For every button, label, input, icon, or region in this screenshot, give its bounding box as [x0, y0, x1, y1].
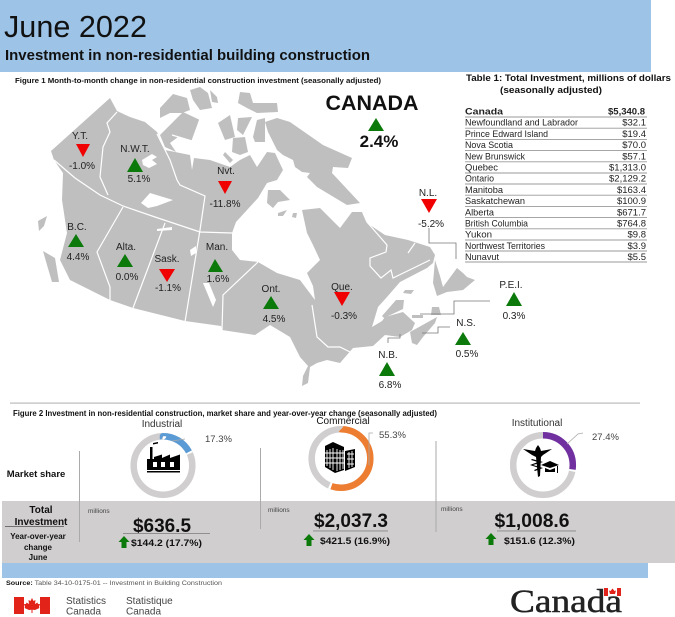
table rows: New Brunswick	[465, 151, 525, 162]
table title	[466, 73, 671, 96]
arrow: up	[304, 534, 314, 546]
panel: institutional: $151.6 (12.3%)	[504, 536, 575, 547]
table rows: Saskatchewan	[465, 196, 525, 207]
Nova Scotia label: N.S.	[456, 318, 476, 329]
table rows: Alberta	[465, 207, 495, 218]
Prince Edward Island label	[499, 280, 526, 322]
Manitoba label: 1.6%	[207, 274, 230, 285]
table rows: Ontario	[465, 174, 494, 185]
table rows: $57.1	[622, 151, 646, 162]
panel: commercial: millions	[268, 507, 290, 514]
national change callout	[326, 92, 418, 151]
row labels: change	[24, 543, 53, 552]
panel: industrial	[88, 419, 232, 549]
Yukon label: Y.T.	[72, 131, 88, 142]
header banner	[0, 0, 651, 72]
row labels	[5, 469, 68, 562]
icon: maple leaf	[24, 598, 40, 613]
table rows: Prince Edward Island	[465, 129, 548, 140]
panel: commercial: 55.3%	[379, 430, 406, 441]
figure 2 heading: Figure 2 Investment in non-residential construction, market share and year-over-year change (seasonally adjusted)	[13, 409, 437, 418]
table rules	[465, 117, 647, 262]
table rows: $100.9	[617, 196, 646, 207]
Statistics Canada logo: Statistique	[126, 596, 173, 607]
national change callout: CANADA	[326, 92, 418, 115]
British Columbia label	[67, 222, 90, 263]
Nunavut label: -11.8%	[210, 199, 241, 210]
panel: industrial: millions	[88, 508, 110, 515]
table rows: Northwest Territories	[465, 241, 545, 252]
arrow: up	[118, 536, 130, 548]
icon: caduceus and graduation cap	[523, 445, 559, 477]
Quebec label: Que.	[331, 282, 353, 293]
Nunavut label: Nvt.	[217, 166, 235, 177]
panel: institutional: millions	[441, 506, 463, 513]
panel: industrial: 17.3%	[205, 434, 232, 445]
icon: office buildings	[325, 442, 355, 473]
Nunavut label	[210, 166, 241, 210]
row labels: Investment	[15, 517, 68, 528]
grey investment band	[2, 501, 675, 563]
Quebec label: -0.3%	[331, 311, 357, 322]
Ontario label: 4.5%	[263, 314, 286, 325]
Alberta label: Alta.	[116, 242, 136, 253]
subtitle: Investment in non-residential building construction	[5, 47, 370, 64]
donut: commercial 55.3%	[312, 429, 370, 488]
panel: industrial: $636.5	[133, 516, 191, 537]
New Brunswick label: N.B.	[378, 350, 398, 361]
leader lines	[388, 228, 490, 343]
New Brunswick label: 6.8%	[379, 380, 402, 391]
map of Canada	[38, 87, 490, 386]
row labels: June	[29, 553, 48, 562]
Northwest Territories label	[120, 144, 151, 185]
table rows: $5,340.8	[608, 106, 645, 118]
table rows: $3.9	[628, 241, 646, 252]
Manitoba label: Man.	[206, 242, 228, 253]
New Brunswick label	[378, 350, 402, 391]
table rows	[465, 106, 646, 263]
panel: commercial	[268, 416, 406, 547]
Northwest Territories label: 5.1%	[128, 174, 151, 185]
Newfoundland and Labrador label: -5.2%	[418, 219, 444, 230]
panel: institutional: $1,008.6	[494, 511, 570, 532]
panel: institutional: 27.4%	[592, 432, 619, 443]
Ontario label: Ont.	[262, 284, 280, 295]
table title: (seasonally adjusted)	[500, 85, 602, 96]
Northwest Territories label: N.W.T.	[120, 144, 150, 155]
Prince Edward Island label: P.E.I.	[499, 280, 523, 291]
table rows: $5.5	[628, 252, 646, 263]
table rows: $163.4	[617, 185, 646, 196]
panel: commercial: Commercial	[316, 416, 370, 427]
table rows: Quebec	[465, 162, 498, 174]
table rows: Nova Scotia	[465, 140, 514, 151]
Newfoundland and Labrador label: N.L.	[419, 188, 437, 199]
row labels: Year-over-year	[10, 532, 66, 541]
table rows: $70.0	[622, 140, 646, 151]
Saskatchewan label	[154, 254, 181, 294]
row labels: Market share	[7, 469, 65, 480]
Saskatchewan label: Sask.	[154, 254, 180, 265]
table rows: $1,313.0	[609, 162, 646, 174]
table rows: $2,129.2	[609, 174, 646, 185]
Yukon label: -1.0%	[69, 161, 95, 172]
table rows: $19.4	[622, 129, 646, 140]
panel: industrial: $144.2 (17.7%)	[131, 538, 202, 549]
Yukon label	[69, 131, 95, 172]
Ontario label	[262, 284, 286, 325]
Manitoba label	[206, 242, 230, 285]
donut: institutional 27.4%	[513, 435, 573, 495]
Statistics Canada logo: Statistics	[66, 596, 106, 607]
icon: small flag	[604, 588, 621, 596]
panel: industrial: Industrial	[142, 419, 182, 430]
national change callout: 2.4%	[360, 132, 398, 151]
figure 1 heading: Figure 1 Month-to-month change in non-residential construction investment (seasonally adjusted)	[15, 76, 381, 85]
panel: institutional	[441, 418, 619, 547]
table rows: Nunavut	[465, 252, 499, 263]
Quebec label	[331, 282, 357, 322]
table 1	[465, 73, 671, 263]
British Columbia label: B.C.	[67, 222, 87, 233]
title: June 2022	[4, 9, 147, 44]
table rows: $764.8	[617, 218, 646, 230]
table rows: Yukon	[465, 230, 492, 241]
blue footer strip	[2, 563, 648, 578]
Saskatchewan label: -1.1%	[155, 283, 181, 294]
Alberta label	[116, 242, 139, 283]
Nova Scotia label: 0.5%	[456, 349, 479, 360]
table rows: Canada	[465, 106, 504, 118]
British Columbia label: 4.4%	[67, 252, 90, 263]
column dividers	[79, 441, 436, 542]
panel: commercial: $2,037.3	[314, 511, 388, 532]
table rows: Newfoundland and Labrador	[465, 118, 578, 129]
Alberta label: 0.0%	[116, 272, 139, 283]
table rows: $32.1	[622, 118, 646, 129]
table rows: $9.8	[628, 230, 646, 241]
table rows: $671.7	[617, 207, 646, 218]
panel: commercial: $421.5 (16.9%)	[320, 536, 390, 547]
arrow: up	[486, 533, 496, 545]
section rule	[10, 402, 640, 404]
Prince Edward Island label: 0.3%	[503, 311, 526, 322]
icon: factory	[147, 442, 180, 472]
source note: Source: Table 34-10-0175-01 -- Investment in Building Construction	[6, 580, 222, 587]
Nova Scotia label	[455, 318, 479, 360]
panel: institutional: Institutional	[512, 418, 562, 429]
Statistics Canada logo	[14, 596, 173, 617]
table title: Table 1: Total Investment, millions of dollars	[466, 73, 671, 84]
Newfoundland and Labrador label	[418, 188, 444, 230]
table rows: Manitoba	[465, 185, 504, 196]
row labels: Total	[29, 505, 53, 516]
donut: industrial 17.3%	[134, 436, 192, 495]
table rows: British Columbia	[465, 218, 529, 230]
